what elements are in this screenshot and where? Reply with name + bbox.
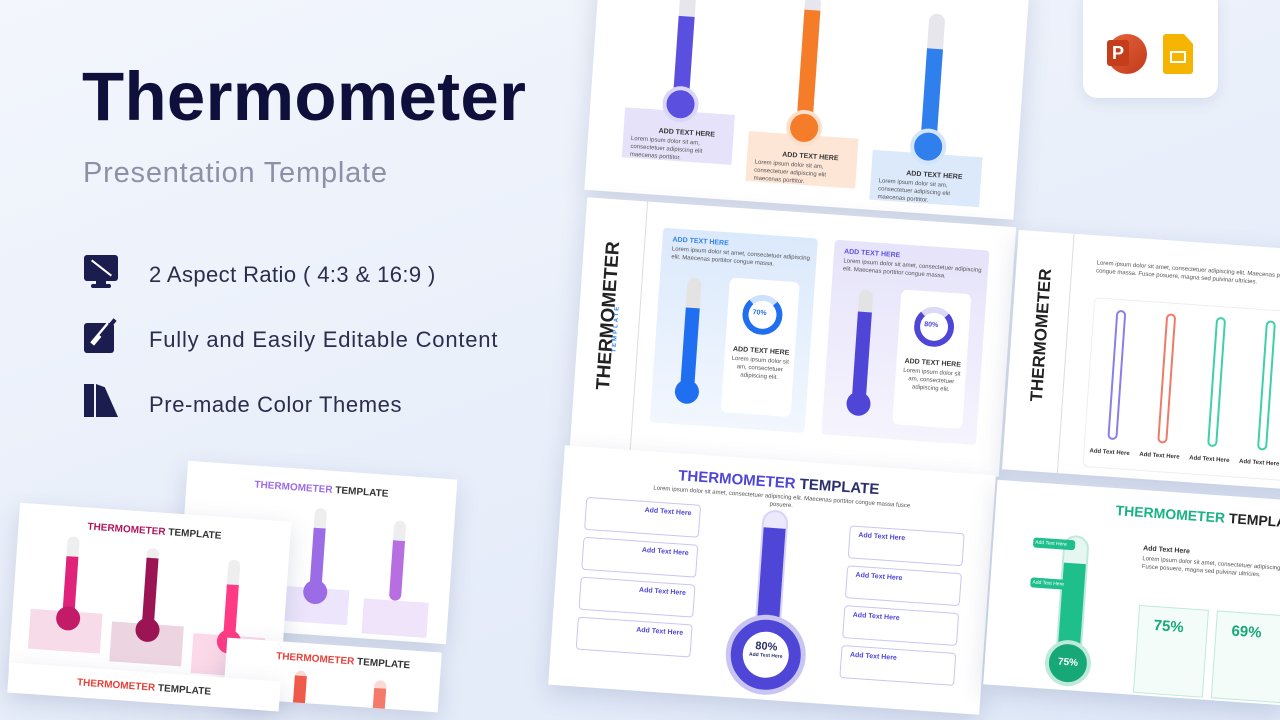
thermometers row: Add Text Here — [1139, 452, 1180, 461]
big thermometer: Add Text Here — [749, 652, 783, 660]
panel blue: ADD TEXT HERE — [733, 346, 790, 357]
right text boxes: Add Text Here — [852, 612, 900, 622]
feature 3 text: Pre-made Color Themes — [149, 392, 402, 417]
small slide: purple template — [177, 461, 457, 644]
slide: two panels with donuts: TEMPLATE — [611, 305, 621, 353]
panel blue: Lorem ipsum dolor sit amet, consectetuer adipiscing elit. Maecenas porttitor congue massa. — [671, 246, 810, 267]
panel blue: Lorem ipsum dolor sit am, consectetuer adipiscing elit. — [731, 356, 789, 381]
text box orange — [745, 131, 859, 189]
panel purple — [821, 240, 990, 445]
small slide: red template — [223, 638, 442, 712]
text box purple: Lorem ipsum dolor sit am, consectetuer adipiscing elit maecenas porttitor. — [630, 136, 703, 161]
slide: green thermometer: Add Text Here — [1143, 545, 1190, 555]
slide: green thermometer — [983, 480, 1280, 705]
slide: green thermometer: Add Text Here — [1035, 540, 1067, 548]
stat 75% — [1133, 605, 1209, 698]
slide: four thermometers (right) — [1002, 230, 1280, 490]
left text boxes — [576, 497, 701, 658]
left text boxes: Add Text Here — [642, 547, 689, 557]
feature list — [84, 255, 498, 417]
icon: color swatches — [84, 384, 118, 417]
stat 75%: 75% — [1153, 617, 1184, 636]
left text boxes: Add Text Here — [639, 587, 686, 597]
panel purple: ADD TEXT HERE — [904, 358, 961, 369]
big thermometer — [726, 510, 806, 695]
panel purple: 80% — [924, 321, 938, 329]
right text boxes — [840, 526, 964, 686]
slide: central thermometer list: Lorem ipsum dolor sit amet, consectetuer adipiscing elit. Maecenas porttitor congue massa fusce posuere. — [653, 486, 910, 509]
app logos badge: P — [1112, 43, 1124, 63]
slide: two panels with donuts — [570, 197, 1016, 477]
slide: central thermometer list — [548, 445, 996, 715]
slide: green thermometer: Add Text Here — [1032, 579, 1064, 588]
stat 69%: 69% — [1231, 622, 1262, 642]
text box orange: Lorem ipsum dolor sit am, consectetuer adipiscing elit maecenas porttitor. — [753, 160, 826, 185]
thermometer purple — [662, 0, 698, 122]
thermometer orange — [786, 0, 822, 146]
panel purple: Lorem ipsum dolor sit amet, consectetuer adipiscing elit. Maecenas porttitor congue massa. — [843, 258, 982, 279]
small slide: purple template: THERMOMETER TEMPLATE — [254, 479, 389, 500]
thermometers row — [1082, 297, 1280, 482]
text box purple: ADD TEXT HERE — [658, 128, 715, 139]
panel purple: ADD TEXT HERE — [844, 248, 901, 259]
left text boxes: Add Text Here — [644, 507, 692, 517]
text box orange: ADD TEXT HERE — [782, 151, 839, 162]
thermometers row: Add Text Here — [1239, 459, 1279, 468]
thermometer blue — [910, 14, 946, 164]
slide: three thermometers (top) — [584, 0, 1030, 220]
slide title: THERMOMETER TEMPLATE — [678, 467, 880, 498]
panel blue — [650, 228, 818, 433]
panel blue: 70% — [752, 309, 767, 317]
icon: edit — [84, 318, 116, 353]
vertical title: THERMOMETER — [593, 241, 624, 391]
text box blue: ADD TEXT HERE — [906, 170, 963, 181]
thermometers row: Add Text Here — [1089, 448, 1130, 457]
icon: powerpoint — [1107, 34, 1147, 74]
right text boxes: Add Text Here — [850, 652, 897, 662]
feature 1 text: 2 Aspect Ratio ( 4:3 & 16:9 ) — [149, 262, 436, 287]
panel purple: Lorem ipsum dolor sit am, consectetuer adipiscing elit. — [903, 368, 961, 393]
app logos badge — [1083, 0, 1218, 98]
title: Thermometer — [82, 58, 526, 135]
icon: google slides — [1163, 34, 1193, 74]
right text boxes: Add Text Here — [858, 532, 905, 542]
vertical title: THERMOMETER — [1027, 268, 1055, 402]
stat 69% — [1211, 610, 1280, 703]
slide: green thermometer: 75% — [1058, 656, 1078, 669]
left text boxes: Add Text Here — [636, 627, 683, 637]
text box purple — [622, 107, 735, 165]
text box blue: Lorem ipsum dolor sit am, consectetuer adipiscing elit maecenas porttitor. — [877, 178, 950, 203]
small slide: red template: THERMOMETER TEMPLATE — [276, 651, 410, 671]
small slide: pink template: THERMOMETER TEMPLATE — [87, 521, 222, 542]
small slide: pink template — [9, 503, 291, 686]
thermometers row: Add Text Here — [1189, 455, 1230, 464]
panel blue: ADD TEXT HERE — [672, 236, 729, 247]
feature 2 text: Fully and Easily Editable Content — [149, 327, 498, 352]
text box blue — [869, 150, 983, 207]
small slide: coral template: THERMOMETER TEMPLATE — [77, 677, 211, 698]
big thermometer: 80% — [755, 640, 778, 654]
small slide: coral template — [7, 663, 281, 711]
right text boxes: Add Text Here — [855, 572, 903, 582]
green thermometer — [1055, 535, 1090, 666]
subtitle: Presentation Template — [83, 157, 388, 189]
icon: monitor — [84, 255, 118, 288]
